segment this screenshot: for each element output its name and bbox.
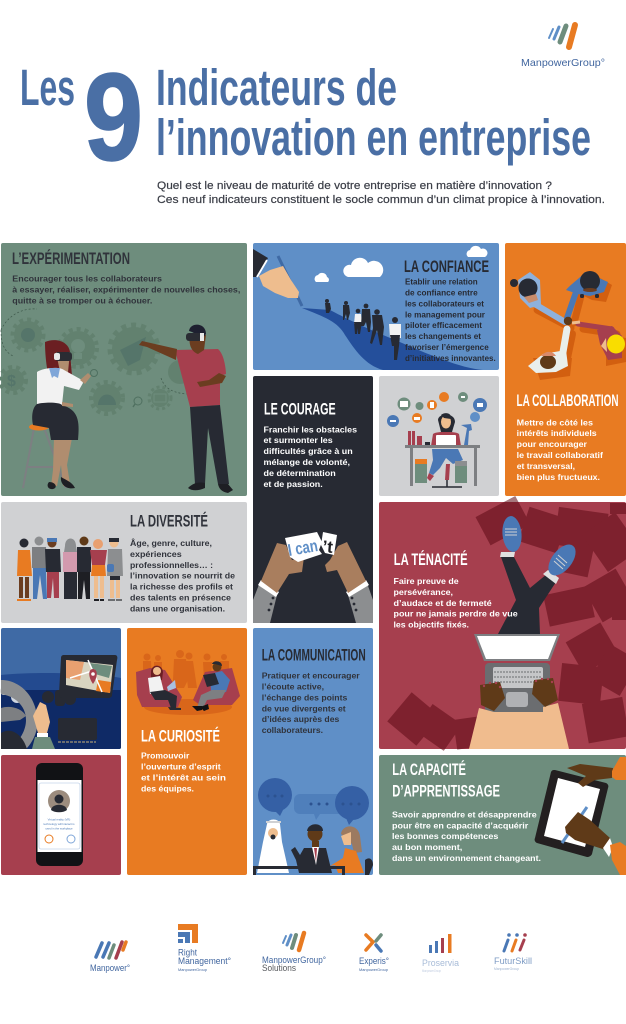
illustration: phone: [36, 763, 83, 866]
text block: les bonnes compétences: [392, 831, 498, 841]
text block: Franchir les obstacles: [264, 424, 357, 434]
logo: Right Management: ManpowerGroup: [178, 968, 207, 972]
text block: de détermination: [264, 468, 336, 478]
logo: Manpower: Manpower°: [90, 963, 130, 973]
logo: Experis: ManpowerGroup: [359, 968, 388, 972]
illustration: legs, shoes and laptop: [469, 515, 581, 749]
panel: L'expérimentation: $: [7, 373, 16, 390]
intro text: Quel est le niveau de maturité de votre entreprise en matière d’innovation ?: [157, 180, 552, 192]
title: [20, 49, 591, 187]
heading: LE COURAGE: [264, 399, 336, 418]
panel: La diversité: [1, 502, 247, 623]
logo: FuturSkill: FuturSkill: [494, 956, 532, 966]
text block: expériences: [130, 549, 182, 559]
illustration: hand drawing with pen: [253, 249, 302, 306]
illustration: woman with VR headset: [23, 340, 98, 489]
text block: et de passion.: [264, 479, 323, 489]
text block: au bon moment,: [392, 842, 462, 852]
panel: L'expérimentation: [0, 243, 247, 496]
text block: quitte à se tromper ou à échouer.: [12, 296, 152, 306]
text block: piloter efficacement: [405, 320, 482, 330]
illustration: two people on bean bags: [136, 650, 240, 715]
panel: desk illustration: [379, 376, 499, 496]
text block: favoriser l’émergence: [405, 342, 489, 352]
text block: l’échange des points: [262, 692, 347, 702]
logo: Proservia: [422, 934, 459, 973]
text block: Promouvoir: [141, 750, 190, 760]
text block: d’initiatives innovantes.: [405, 353, 496, 363]
heading: [392, 760, 500, 800]
logo: Manpower: [90, 942, 130, 973]
illustration: phone: Virtual reality (VR): [48, 818, 70, 822]
illustration: scattered dark sheets: [387, 496, 626, 751]
panel: car dashboard illustration: [0, 628, 121, 749]
logo: Right Management: [178, 924, 231, 972]
illustration: four people handshake from above: [510, 271, 626, 380]
text block: des équipes.: [141, 783, 194, 793]
illustration: hands tearing I can't: [253, 532, 373, 623]
text block: pour ne jamais perdre de vue: [394, 609, 518, 619]
panel: La curiosité: [127, 628, 247, 875]
text block: [517, 417, 603, 482]
text block: et transversal,: [517, 461, 575, 471]
text block: les changements et: [405, 331, 481, 341]
text block: [141, 750, 226, 793]
text block: d’audace et de fermeté: [394, 598, 492, 608]
text block: professionnelles… :: [130, 560, 213, 570]
text block: l’innovation se nourrit de: [130, 571, 235, 581]
text block: Savoir apprendre et désapprendre: [392, 809, 537, 819]
text block: de confiance entre: [405, 288, 478, 298]
illustration: meeting with speech bubbles: [253, 778, 373, 875]
logo: FuturSkill: [494, 933, 532, 971]
logo: Proservia: ManpowerGroup: [422, 969, 441, 973]
illustration: dashboard and gauges: [0, 687, 97, 742]
heading: LA TÉNACITÉ: [394, 550, 468, 569]
text block: [392, 809, 541, 863]
text block: [405, 277, 496, 363]
heading: LA CURIOSITÉ: [141, 727, 220, 746]
text block: Encourager tous les collaborateurs: [12, 274, 162, 284]
text block: collaborateurs.: [262, 725, 323, 735]
illustration: steering wheel and hand: [1, 680, 55, 749]
logo: Experis: Experis°: [359, 956, 389, 966]
illustration: hands tearing I can't: I can: [286, 536, 319, 560]
text block: Etablir une relation: [405, 277, 478, 287]
text block: pour être en capacité d’acquérir: [392, 820, 529, 830]
text block: intérêts individuels: [517, 428, 597, 438]
panel: Le courage: [253, 376, 373, 623]
illustration: gears background: [0, 320, 192, 414]
heading: LA COMMUNICATION: [262, 646, 366, 665]
logo: ManpowerGroup Solutions: ManpowerGroup°: [262, 955, 326, 965]
text block: le management pour: [405, 309, 486, 319]
logo: FuturSkill: ManpowerGroup: [494, 967, 519, 971]
illustration: hands tearing I can't: ’t: [322, 537, 334, 557]
text block: à essayer, réaliser, expérimenter de nouvelles choses,: [12, 285, 240, 295]
title: Indicateurs de: [156, 59, 397, 116]
panel: La confiance: [253, 243, 499, 370]
text block: les collaborateurs et: [405, 298, 484, 308]
illustration: seven diverse people: [17, 536, 123, 600]
text block: la richesse des profils et: [130, 582, 233, 592]
text block: les objectifs fixés.: [394, 620, 469, 630]
illustration: phone: used in the workplace: [45, 826, 73, 830]
logo: ManpowerGroup: ManpowerGroup°: [521, 57, 605, 69]
heading: LA CONFIANCE: [404, 257, 489, 276]
text block: dans une organisation.: [130, 603, 225, 613]
text block: persévérance,: [394, 587, 453, 597]
text block: mélange de volonté,: [264, 457, 350, 467]
illustration: GPS navigation device: [59, 655, 117, 698]
illustration: hands on tablet: [535, 757, 626, 875]
illustration: man with VR headset: [139, 325, 233, 493]
logo: ManpowerGroup: [521, 25, 605, 69]
text block: Faire preuve de: [394, 576, 459, 586]
text block: bien plus fructueux.: [517, 472, 600, 482]
heading: LA CAPACITÉ: [392, 760, 466, 779]
text block: [262, 670, 360, 735]
illustration: woman at desk: [405, 413, 480, 487]
panel: La communication: [253, 628, 373, 875]
text block: de vue divergents et: [262, 703, 346, 713]
title: Les: [20, 59, 75, 116]
illustration: walking people: [325, 299, 401, 360]
logo: Right Management: Right: [178, 948, 197, 958]
text block: [394, 576, 518, 630]
text block: et l’intérêt au sein: [141, 772, 226, 782]
panel: La collaboration: [505, 243, 626, 496]
text block: [12, 274, 240, 306]
text block: Pratiquer et encourager: [262, 670, 360, 680]
icons: floating circles: [387, 392, 487, 427]
text block: des talents en présence: [130, 592, 231, 602]
illustration: phone: technology will Interact is: [43, 822, 75, 826]
title: 9: [84, 49, 143, 187]
intro text: Ces neuf indicateurs constituent le socle commun d’un climat propice à l’innovation.: [157, 194, 605, 206]
heading: D’APPRENTISSAGE: [392, 781, 500, 800]
text block: et surmonter les: [264, 435, 333, 445]
text block: [264, 424, 357, 489]
text block: [130, 537, 235, 613]
panel: La capacité d'apprentissage: [379, 755, 626, 875]
text block: difficultés grâce à un: [264, 446, 353, 456]
text block: d’idées auprès des: [262, 714, 339, 724]
text block: Âge, genre, culture,: [130, 537, 212, 548]
heading: LA DIVERSITÉ: [130, 512, 208, 531]
logo: ManpowerGroup Solutions: [262, 933, 326, 973]
panel: La ténacité: [379, 496, 626, 751]
intro text: [157, 180, 605, 206]
text block: dans un environnement changeant.: [392, 853, 541, 863]
illustration: road and clouds: [302, 246, 487, 370]
text block: l’ouverture d’esprit: [141, 761, 221, 771]
heading: L’EXPÉRIMENTATION: [12, 249, 130, 268]
text block: le travail collaboratif: [517, 450, 603, 460]
panel: smartphone illustration: [1, 755, 121, 875]
logo: Proservia: Proservia: [422, 958, 459, 968]
logo: Experis: [359, 935, 389, 972]
logo: ManpowerGroup Solutions: Solutions: [262, 963, 296, 973]
logo: Right Management: Management°: [178, 956, 231, 966]
text block: pour encourager: [517, 439, 588, 449]
text block: Mettre de côté les: [517, 417, 593, 427]
text block: l’écoute active,: [262, 681, 324, 691]
